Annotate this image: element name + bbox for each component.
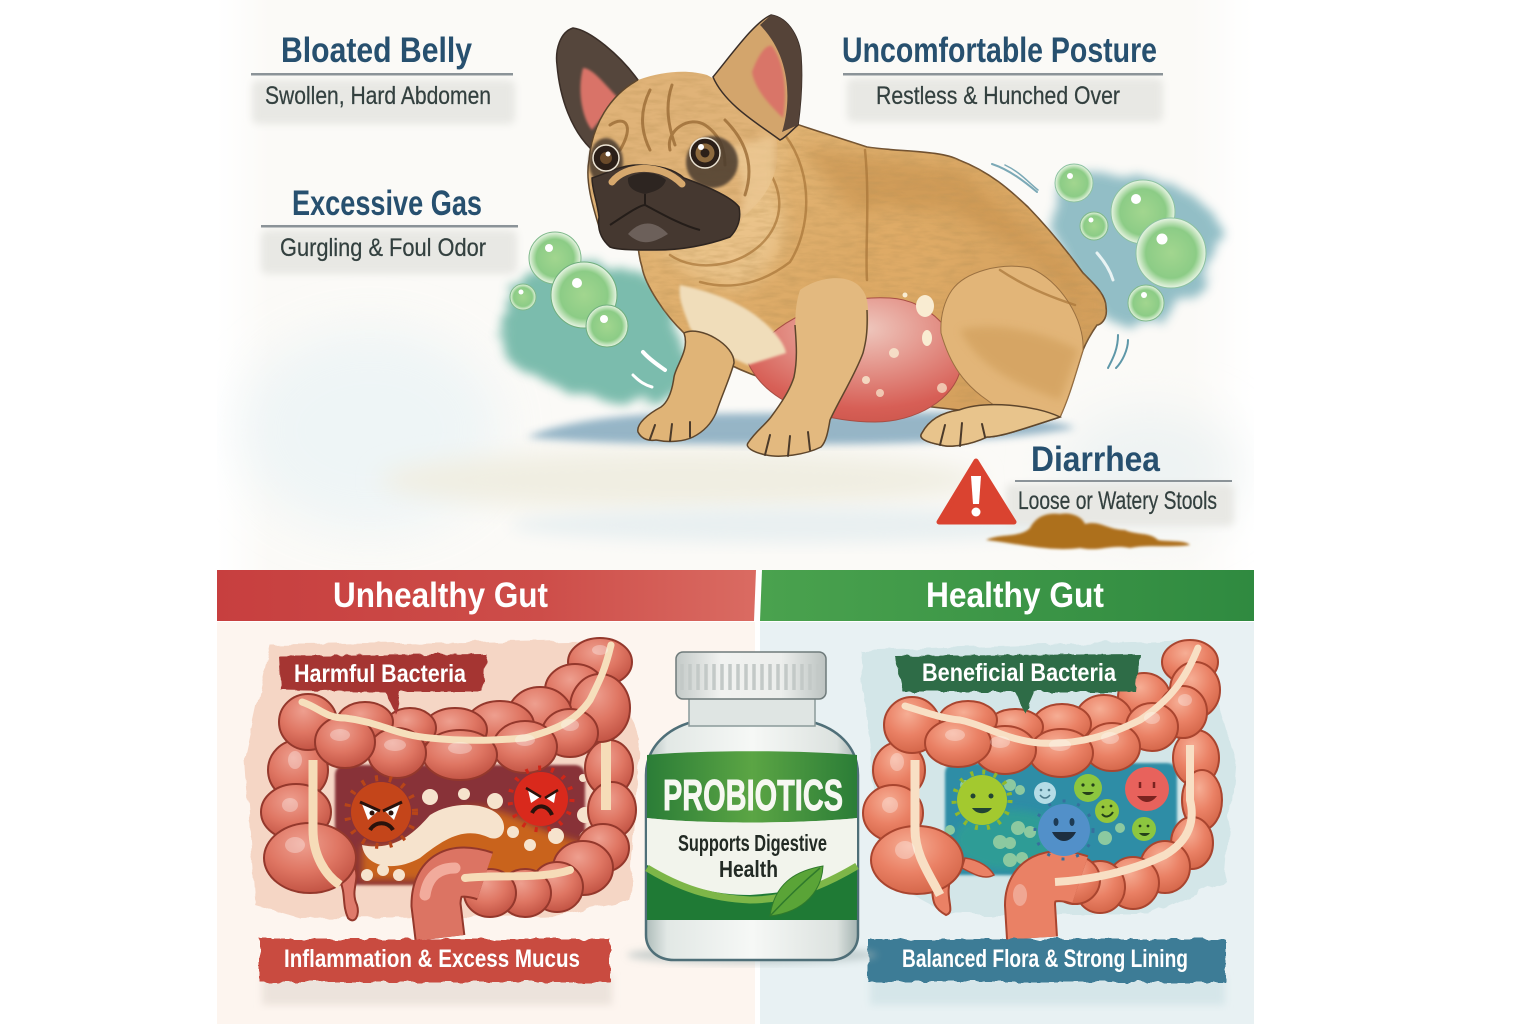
dog eyes — [593, 138, 720, 171]
right descending colon — [553, 738, 636, 895]
beneficial bacterium: blue — [1035, 801, 1093, 859]
dog head texture — [590, 72, 776, 221]
dog front leg right outline — [747, 310, 867, 456]
dog forehead wrinkles — [610, 85, 749, 195]
label: Bloated Belly: Bloated Belly — [281, 31, 472, 70]
panel: healthy background — [760, 622, 1254, 1024]
background: blue gas wash right — [1040, 177, 1217, 325]
label: Uncomfortable Posture: Uncomfortable Posture — [842, 31, 1157, 70]
label: Bloated Belly: Swollen, Hard Abdomen — [265, 82, 491, 110]
mucus blobs — [361, 774, 612, 881]
label bottom green — [647, 865, 857, 920]
bottle product name: PROBIOTICS — [663, 771, 843, 820]
bubbles left — [510, 232, 628, 347]
dog front leg left — [638, 331, 734, 441]
illustration: French bulldog with bloated belly — [557, 15, 1110, 456]
wash: healthy colon halo — [860, 640, 1235, 915]
banner: Inflammation & Excess Mucus — [260, 939, 610, 982]
dog nose roll — [612, 168, 682, 184]
flora spots — [945, 779, 1125, 867]
upper healthy back row — [884, 640, 1220, 753]
banner: Balanced Flora & Strong Lining: Balanced Flora & Strong Lining — [902, 945, 1188, 973]
beneficial bacterium: green — [954, 772, 1010, 828]
bottle cap — [676, 652, 826, 699]
label: Uncomfortable Posture: Restless & Hunched Over — [876, 82, 1120, 110]
label: Diarrhea: Diarrhea — [1031, 440, 1160, 479]
small friendly bacteria — [1034, 774, 1156, 841]
harmful bacterium: red — [510, 768, 572, 830]
header: Unhealthy Gut — [217, 570, 756, 621]
panel: unhealthy background — [217, 622, 755, 1024]
segment highlights — [282, 645, 608, 853]
label: Bloated Belly — [251, 31, 513, 110]
tag: Harmful Bacteria: Harmful Bacteria — [294, 660, 467, 688]
label green swoosh — [647, 866, 857, 900]
healthy band lower — [1055, 745, 1192, 882]
left ascending colon — [261, 740, 358, 920]
dog ear left — [557, 28, 638, 148]
dog rear shadow gap — [950, 365, 1000, 402]
colon band — [302, 645, 611, 740]
header: Unhealthy Gut: Unhealthy Gut — [333, 576, 548, 615]
motion lines — [633, 164, 1128, 387]
label: Excessive Gas: Excessive Gas — [292, 184, 482, 223]
header: Healthy Gut: Healthy Gut — [926, 576, 1104, 615]
label: Excessive Gas: Gurgling & Foul Odor — [280, 234, 486, 262]
lower colon segments — [464, 862, 583, 917]
background: watercolor washes — [240, 330, 1240, 543]
dog front leg right — [747, 278, 868, 456]
interior teal patch — [955, 810, 1065, 870]
icon: leaf — [770, 866, 823, 916]
label wash: diarrhea — [1006, 484, 1234, 526]
right healthy colon — [1050, 730, 1222, 913]
dog body shading — [639, 130, 1106, 401]
dog mouth — [610, 194, 700, 230]
harmful bacterium: dark orange — [347, 778, 415, 846]
dog body — [638, 90, 1106, 446]
dog head — [588, 72, 778, 252]
upper colon front row — [315, 709, 598, 780]
background: green gas wash left — [495, 262, 700, 401]
illustration: probiotics bottle — [646, 652, 858, 960]
sigmoid tube healthy — [1030, 876, 1080, 938]
background: top paper — [217, 0, 1254, 570]
label wash: posture — [847, 78, 1163, 122]
label wash: bloated belly — [252, 80, 515, 124]
lower colon band — [465, 870, 570, 878]
bottle shadow — [627, 946, 877, 964]
ground shadow — [527, 412, 1075, 444]
upper healthy front row — [925, 686, 1207, 777]
dog muzzle — [592, 165, 740, 250]
dog paw toes — [650, 422, 985, 456]
label: Diarrhea — [1015, 440, 1232, 515]
dog eye patches — [589, 136, 738, 188]
bottle neck — [689, 698, 815, 726]
healthy colon band — [905, 648, 1198, 743]
banner: Inflammation & Excess Mucus: Inflammation & Excess Mucus — [284, 945, 580, 973]
inflamed interior — [335, 765, 585, 885]
banner shadow: unhealthy — [262, 975, 612, 1005]
healthy segment highlights — [882, 694, 1192, 906]
illustration: healthy colon — [863, 640, 1222, 938]
banner: Balanced Flora & Strong Lining — [868, 939, 1225, 982]
upper colon back row — [279, 638, 632, 752]
dog ear right — [713, 15, 802, 140]
dog rear paw — [921, 405, 1060, 446]
bubbles right — [1055, 164, 1206, 321]
bottle description — [678, 830, 827, 882]
inflamed orange lining — [362, 808, 590, 880]
dog chest — [680, 285, 786, 365]
dog bloated belly — [748, 298, 961, 422]
dog rear thigh — [941, 266, 1083, 419]
icon: warning triangle — [939, 461, 1014, 522]
tag: Beneficial Bacteria — [895, 654, 1140, 713]
dog head outline left — [588, 80, 638, 233]
belly highlights — [862, 292, 947, 397]
header: Healthy Gut — [760, 570, 1254, 621]
left healthy colon — [863, 742, 994, 915]
sigmoid tube — [425, 868, 485, 938]
bottle description: Supports Digestive — [678, 830, 827, 856]
icon: stool puddle — [986, 513, 1190, 549]
label wash: gas — [261, 230, 517, 274]
label: Diarrhea: Loose or Watery Stools — [1018, 487, 1217, 515]
label top green — [647, 751, 857, 822]
bottle body — [646, 722, 858, 960]
bottle description: Health — [719, 856, 778, 882]
healthy interior — [945, 763, 1177, 875]
illustration: unhealthy colon — [261, 638, 636, 938]
dog fur folds — [670, 135, 1075, 305]
banner shadow: healthy — [870, 975, 1225, 1005]
dog nose — [628, 173, 666, 194]
tag: Beneficial Bacteria: Beneficial Bacteria — [922, 659, 1117, 687]
tag: Harmful Bacteria — [279, 654, 486, 715]
label: Excessive Gas — [261, 184, 518, 262]
label white — [647, 818, 857, 895]
beneficial bacterium: red — [1125, 767, 1169, 811]
dog thigh shading — [960, 327, 1078, 400]
label: Uncomfortable Posture — [842, 31, 1163, 110]
wash: unhealthy colon halo — [245, 640, 640, 918]
